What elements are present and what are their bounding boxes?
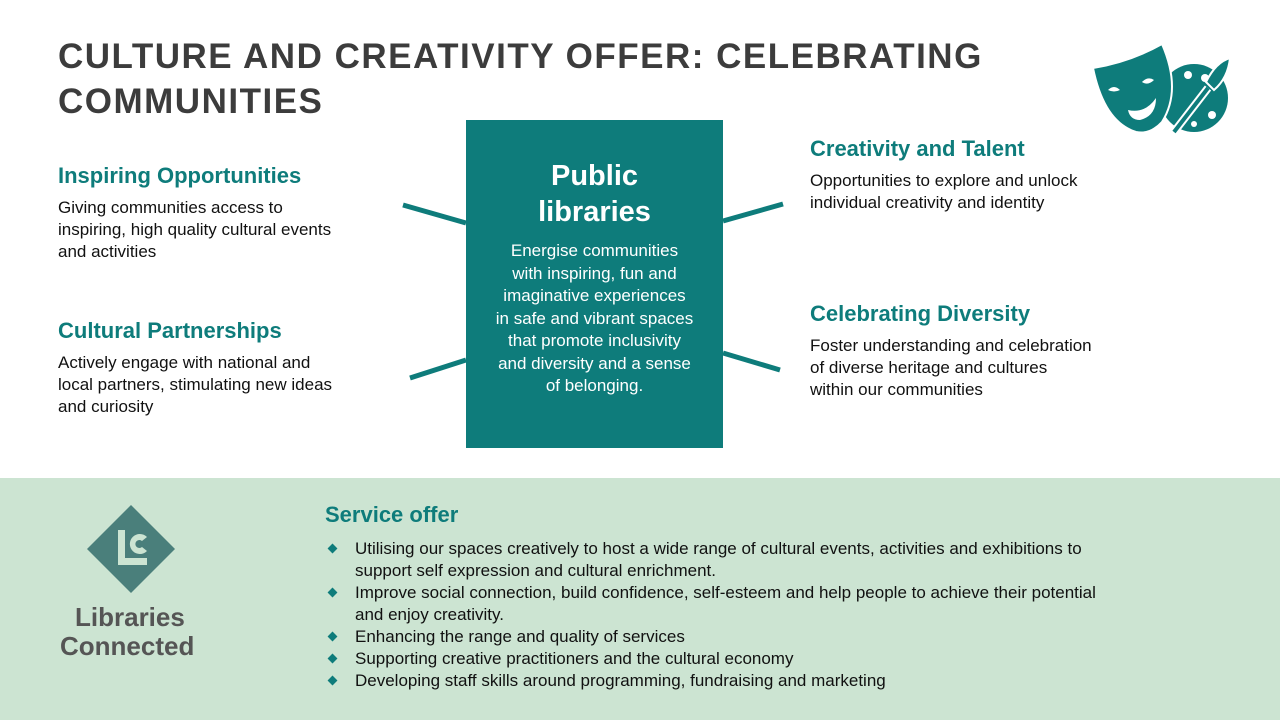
center box: public libraries: with inspiring, fun and	[512, 264, 677, 282]
logo: libraries connected	[60, 505, 194, 661]
center box: public libraries: libraries	[538, 196, 651, 228]
bottom band	[0, 478, 1280, 720]
title: CULTURE AND CREATIVITY OFFER: CELEBRATING	[58, 37, 983, 76]
panel: celebrating diversity: of diverse heritage and cultures	[810, 358, 1047, 377]
panel: cultural partnerships: local partners, stimulating new ideas	[58, 375, 332, 394]
panel: celebrating diversity: Celebrating Diversity	[810, 301, 1030, 326]
panel: celebrating diversity	[810, 301, 1092, 399]
center box: public libraries: Energise communities	[511, 241, 678, 260]
connector lines	[402, 202, 784, 380]
panel: inspiring opportunities: and activities	[58, 242, 156, 261]
title	[58, 37, 983, 121]
icon: theatre masks and palette	[1094, 46, 1229, 134]
service offer: Developing staff skills around programming, fundraising and marketing	[355, 671, 886, 690]
logo: libraries connected: Libraries	[75, 602, 185, 632]
panel: cultural partnerships	[58, 318, 332, 416]
panel: cultural partnerships: and curiosity	[58, 397, 153, 416]
logo: libraries connected: Connected	[60, 631, 194, 661]
service offer: support self expression and cultural enrichment.	[355, 561, 716, 580]
panel: inspiring opportunities: Giving communities access to	[58, 198, 283, 217]
panel: creativity and talent	[810, 136, 1078, 212]
panel: creativity and talent: Creativity and Talent	[810, 136, 1025, 161]
panel: cultural partnerships: Cultural Partnerships	[58, 318, 282, 343]
center box: public libraries: Public	[551, 160, 638, 192]
panel: creativity and talent: individual creativity and identity	[810, 193, 1044, 212]
panel: celebrating diversity: within our communities	[810, 380, 983, 399]
panel: inspiring opportunities: inspiring, high quality cultural events	[58, 220, 331, 239]
panel: cultural partnerships: Actively engage with national and	[58, 353, 310, 372]
service offer: Service offer	[325, 502, 458, 527]
service offer: Supporting creative practitioners and the cultural economy	[355, 649, 793, 668]
center box: public libraries	[466, 120, 723, 448]
center box: public libraries: imaginative experiences	[503, 286, 686, 305]
center box: public libraries: in safe and vibrant spaces	[496, 308, 693, 328]
panel: creativity and talent: Opportunities to explore and unlock	[810, 171, 1077, 190]
service offer: Enhancing the range and quality of services	[355, 627, 685, 646]
center box: public libraries: and diversity and a sense	[498, 354, 691, 372]
center box: public libraries: of belonging.	[546, 376, 643, 395]
panel: celebrating diversity: Foster understanding and celebration	[810, 336, 1092, 355]
service offer: and enjoy creativity.	[355, 605, 504, 624]
service offer	[325, 502, 1096, 690]
service offer: Improve social connection, build confidence, self-esteem and help people to achieve their potential	[355, 583, 1096, 602]
panel: inspiring opportunities	[58, 163, 331, 261]
service offer: Utilising our spaces creatively to host a wide range of cultural events, activities and exhibitions to	[355, 539, 1082, 558]
panel: inspiring opportunities: Inspiring Opportunities	[58, 163, 301, 188]
title: COMMUNITIES	[58, 82, 323, 121]
center box: public libraries: that promote inclusivity	[508, 331, 681, 350]
